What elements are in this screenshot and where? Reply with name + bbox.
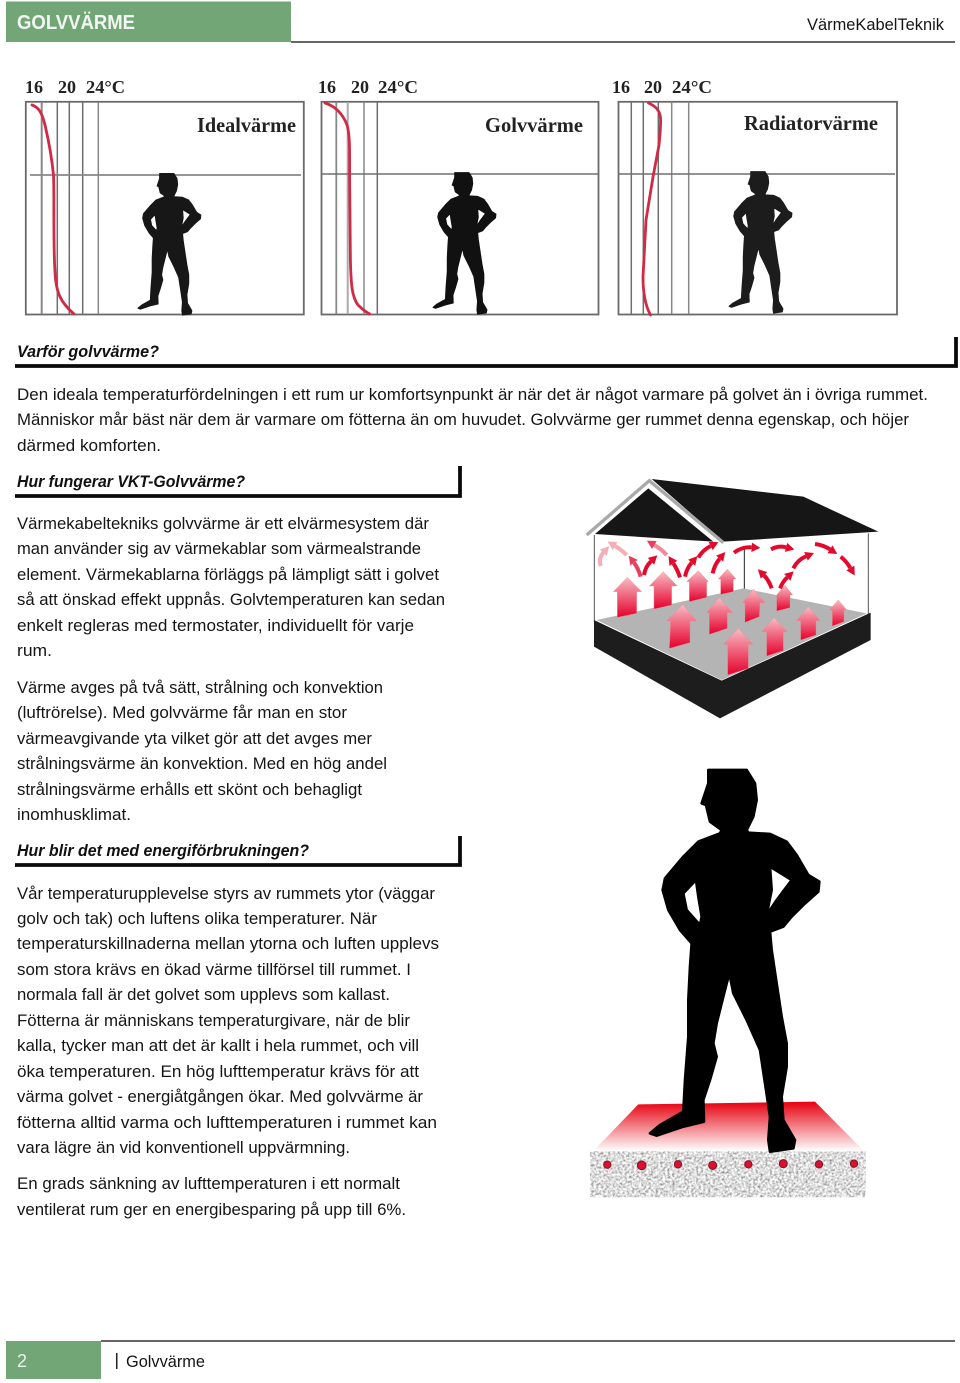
text block: intro: därmed komforten. — [17, 437, 161, 455]
text block: energy saving — [17, 1175, 406, 1219]
header band: VärmeKabelTeknik — [807, 16, 945, 34]
footer band: 2 — [17, 1351, 27, 1371]
chart: Golvvärme temperature profile — [318, 77, 598, 314]
chart: Idealvärme temperature profile: 24°C — [86, 77, 125, 97]
chart: Golvvärme temperature profile: 20 — [351, 77, 369, 97]
text block: how it works: rum. — [17, 642, 52, 660]
concrete slab — [590, 1151, 866, 1197]
footer band: Golvvärme — [126, 1353, 205, 1371]
text block: energy use: öka temperaturen. En hög lufttemperatur krävs för att — [17, 1063, 419, 1081]
chart: Idealvärme temperature profile: 20 — [58, 77, 76, 97]
illustration: house with heated floor — [587, 479, 878, 718]
heading: Varför golvvärme — [15, 337, 956, 366]
text block: how it works: så att önskad effekt uppnås. Golvtemperaturen kan sedan — [17, 591, 445, 609]
text block: radiation and convection: strålningsvärme erhålls ett skönt och behagligt — [17, 781, 362, 799]
header band: GOLVVÄRME — [17, 11, 135, 34]
footer band — [6, 1340, 955, 1379]
chart: Golvvärme temperature profile: 16 — [318, 77, 336, 97]
chart: Golvvärme temperature profile: 24°C — [378, 77, 418, 97]
heading: Hur blir det med energiförbrukningen — [15, 836, 460, 865]
text block: how it works: Värmekabeltekniks golvvärme är ett elvärmesystem där — [17, 515, 430, 533]
header band — [6, 2, 955, 43]
text block: energy use: fötterna alltid varma och lufttemperaturen i rummet kan — [17, 1114, 437, 1132]
heating cables — [604, 1160, 858, 1170]
text block: how it works: man använder sig av värmekablar som värmealstrande — [17, 540, 421, 558]
text block: intro: Den ideala temperaturfördelningen i ett rum ur komfortsynpunkt är när det är något varmare på golvet än i övriga rummet. — [17, 386, 928, 404]
chart: Golvvärme temperature profile: Golvvärme — [485, 113, 583, 137]
text block: energy use: vara lägre än vid konventionell uppvärmning. — [17, 1139, 350, 1157]
chart: Radiatorvärme temperature profile: 24°C — [672, 77, 712, 97]
text block: energy use: kalla, tycker man att det är kallt i hela rummet, och vill — [17, 1037, 419, 1055]
heading: Hur fungerar VKT-Golvvärme: Hur fungerar VKT-Golvvärme? — [17, 473, 245, 491]
floor surface — [597, 588, 867, 680]
chart: Idealvärme temperature profile — [25, 77, 304, 315]
text block: energy use — [17, 885, 439, 1157]
text block: energy use: Fötterna är människans temperaturgivare, när de blir — [17, 1012, 411, 1030]
text block: how it works: enkelt regleras med termostater, individuellt för varje — [17, 617, 414, 635]
roof — [587, 479, 878, 543]
text block: radiation and convection — [17, 679, 387, 824]
text block: energy use: Vår temperaturupplevelse styrs av rummets ytor (väggar — [17, 885, 436, 903]
text block: radiation and convection: Värme avges på två sätt, strålning och konvektion — [17, 679, 383, 697]
text block: energy saving: ventilerat rum ger en energibesparing på upp till 6%. — [17, 1201, 406, 1219]
chart: Radiatorvärme temperature profile: Radiatorvärme — [744, 111, 878, 135]
text block: energy saving: En grads sänkning av lufttemperaturen i ett normalt — [17, 1175, 400, 1193]
curved heat flow arrows — [600, 544, 850, 588]
illustration: person on heated floor — [590, 770, 866, 1197]
text block: energy use: temperaturskillnaderna mellan ytorna och luften upplevs — [17, 935, 439, 953]
text block: intro: Människor mår bäst när dem är varmare om fötterna än om huvudet. Golvvärme ger rummet denna egenskap, och höjer — [17, 411, 910, 429]
text block: radiation and convection: (luftrörelse). Med golvvärme får man en stor — [17, 704, 348, 722]
foundation — [594, 613, 871, 718]
heated floor surface — [593, 1102, 864, 1151]
person silhouette — [650, 770, 819, 1152]
chart: Radiatorvärme temperature profile: 20 — [644, 77, 662, 97]
text block: how it works: element. Värmekablarna förläggs på lämpligt sätt i golvet — [17, 566, 439, 584]
chart: Radiatorvärme temperature profile — [612, 77, 897, 315]
large heat arrows — [613, 569, 847, 675]
chart: Idealvärme temperature profile: Idealvärme — [197, 113, 296, 137]
chart: Radiatorvärme temperature profile: 16 — [612, 77, 630, 97]
text block: how it works — [17, 515, 445, 660]
heading: Varför golvvärme: Varför golvvärme? — [17, 343, 159, 361]
chart: Idealvärme temperature profile: 16 — [25, 77, 43, 97]
text block: energy use: som stora krävs en ökad värme tillförsel till rummet. I — [17, 961, 411, 979]
heading: Hur blir det med energiförbrukningen: Hur blir det med energiförbrukningen? — [17, 842, 309, 860]
text block: energy use: värma golvet - energiåtgången ökar. Med golvvärme är — [17, 1088, 424, 1106]
text block: radiation and convection: inomhusklimat. — [17, 806, 131, 824]
text block: radiation and convection: värmeavgivande yta vilket gör att det avges mer — [17, 730, 373, 748]
heading: Hur fungerar VKT-Golvvärme — [15, 466, 460, 496]
text block: radiation and convection: strålningsvärme än konvektion. Med en hög andel — [17, 755, 387, 773]
house walls — [594, 533, 868, 622]
text block: energy use: normala fall är det golvet som upplevs som kallast. — [17, 986, 390, 1004]
text block: intro — [17, 386, 928, 455]
text block: energy use: golv och tak) och luftens olika temperaturer. När — [17, 910, 378, 928]
